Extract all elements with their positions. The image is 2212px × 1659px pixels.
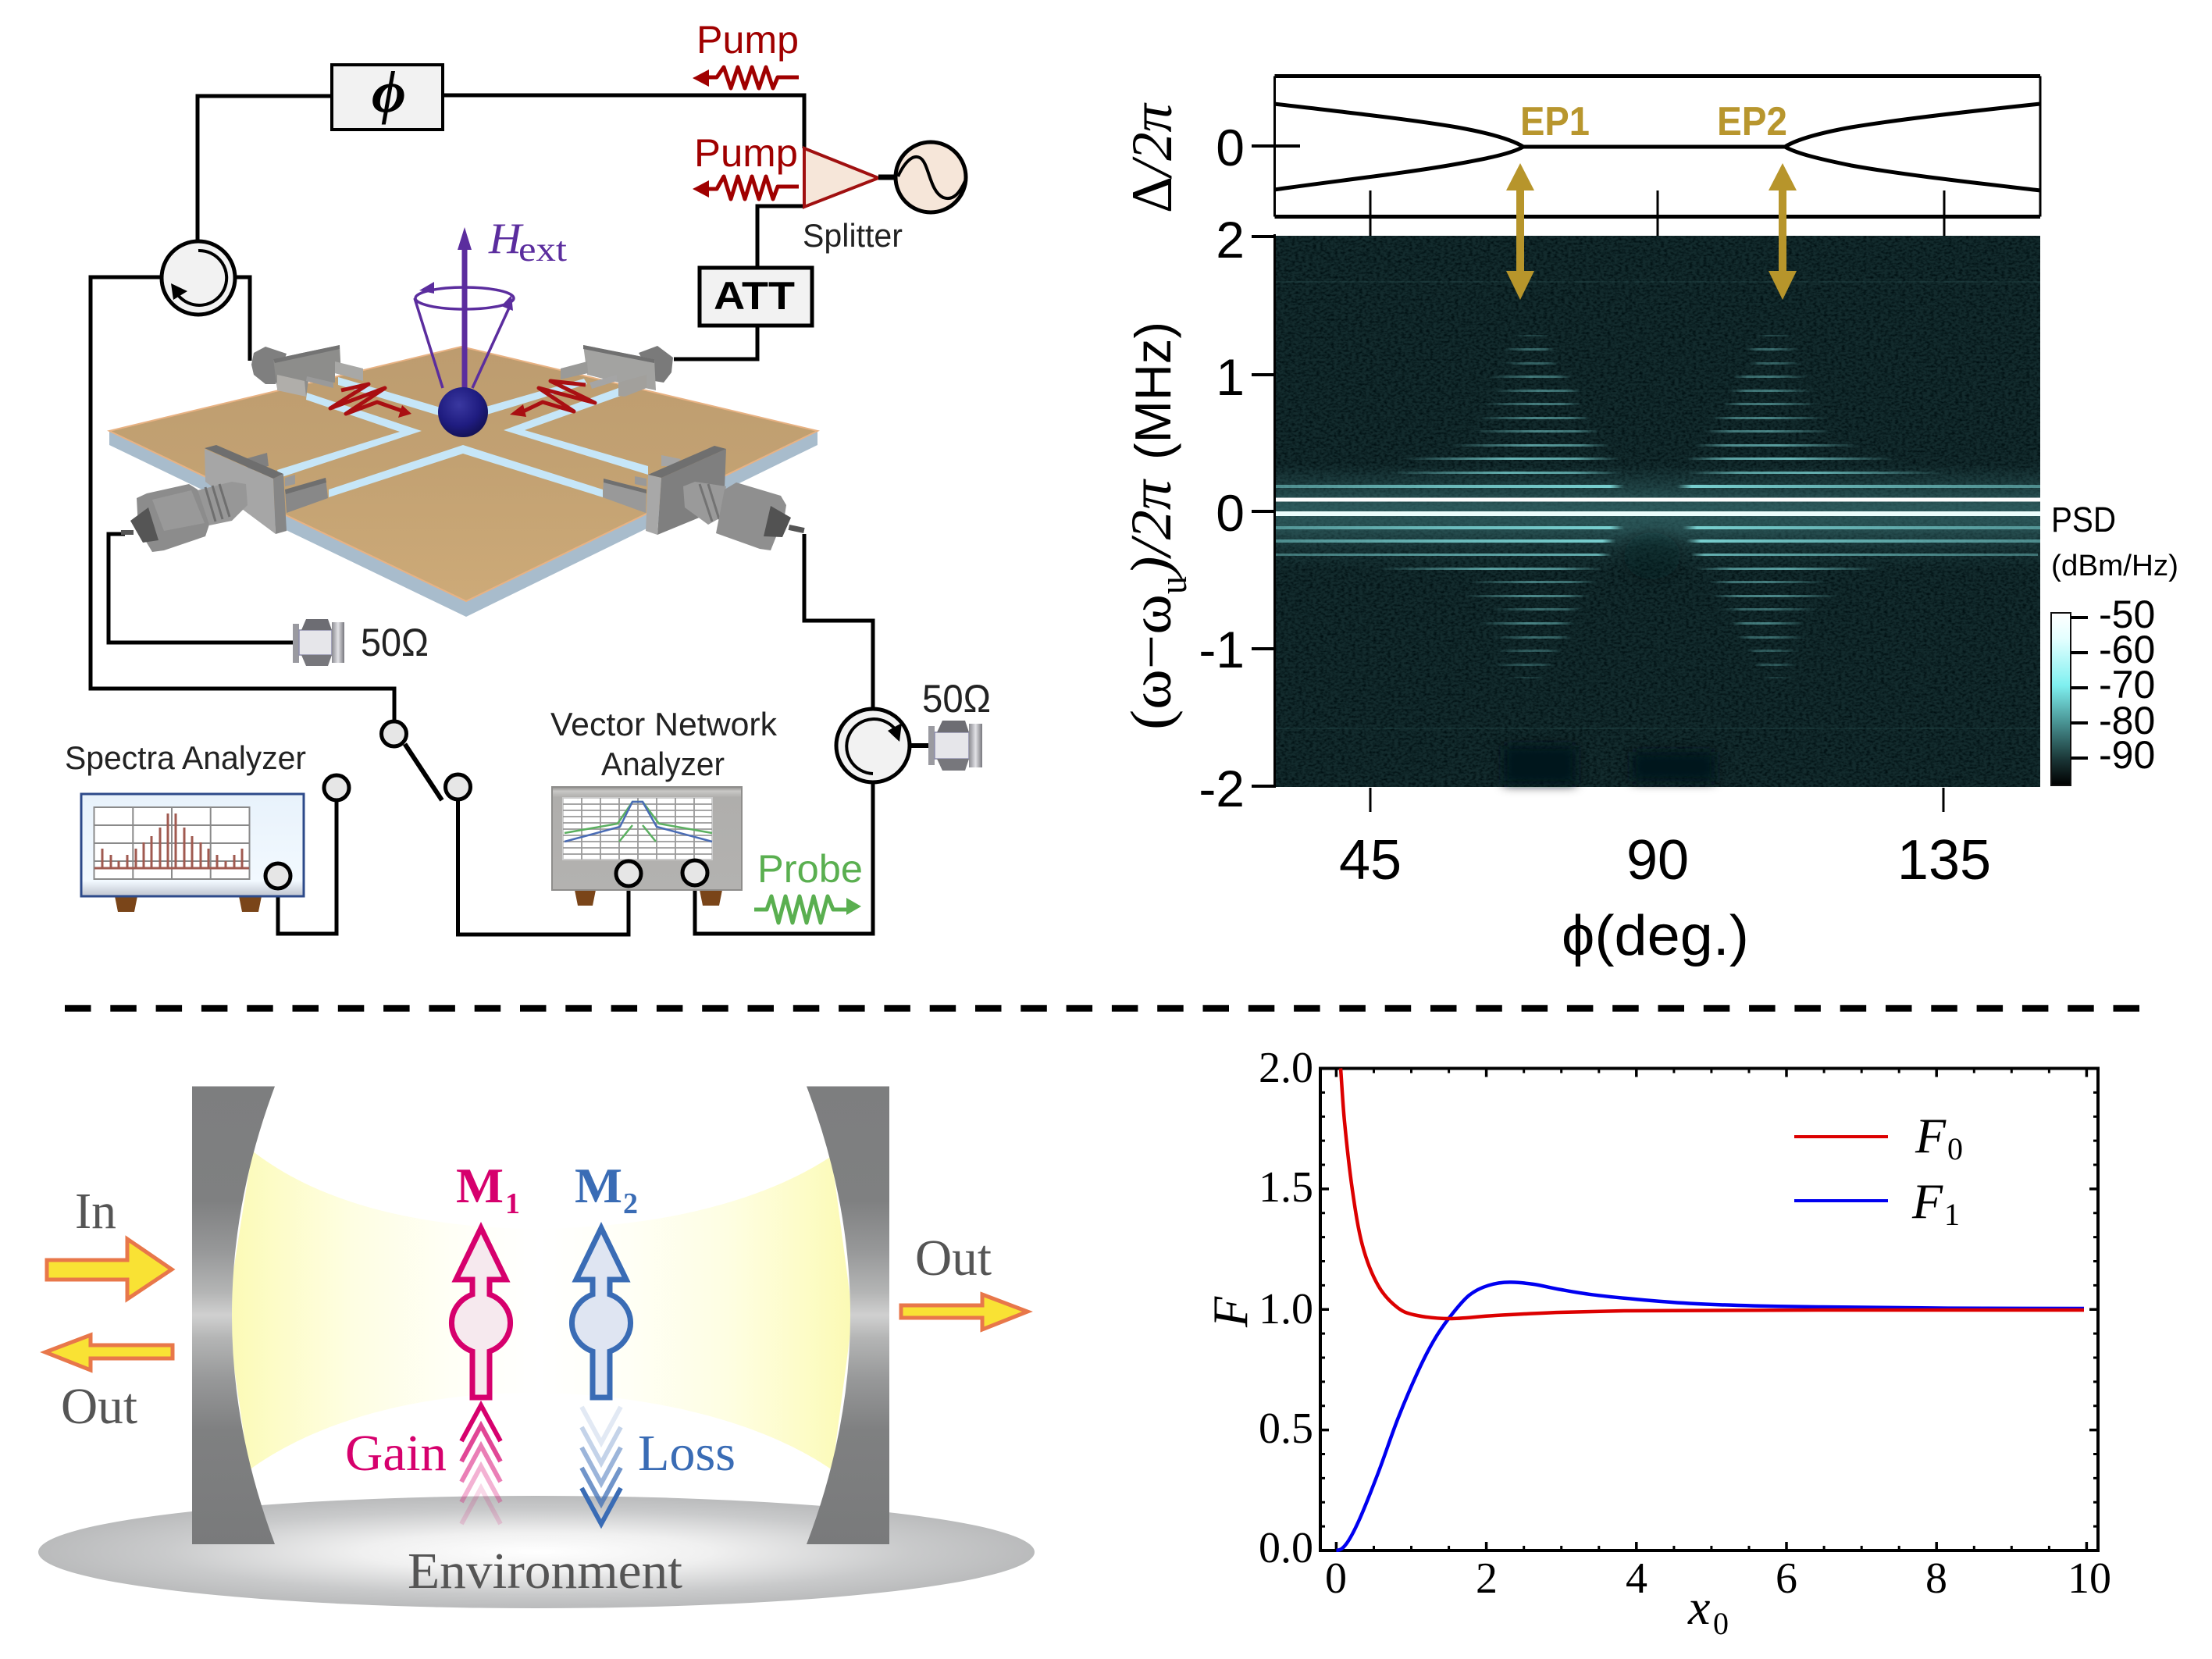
board slot left <box>277 393 422 478</box>
y tick labels: 0 <box>1216 484 1245 542</box>
pump label lower: Pump <box>694 131 798 175</box>
probe wiggle arrow <box>754 896 861 923</box>
magnon spin arrow M1 <box>451 1228 511 1397</box>
EP2 label: EP2 <box>1717 99 1787 144</box>
connector top left <box>251 345 363 397</box>
board slot right <box>504 388 648 475</box>
x tick labels: 90 <box>1626 829 1689 892</box>
vector network analyzer label <box>550 706 778 782</box>
in label: In <box>75 1183 116 1240</box>
board slot bottom <box>329 445 603 497</box>
y tick labels: -1 <box>1199 621 1245 678</box>
panel: experimental circuit schematic <box>65 18 991 935</box>
connector bottom left <box>121 445 328 552</box>
y tick labels: -2 <box>1199 760 1245 817</box>
precession cone and field arrow <box>415 227 514 393</box>
50 ohm terminator left <box>293 619 344 666</box>
divider <box>65 1005 2140 1012</box>
colour bar: -80 <box>2099 699 2155 742</box>
input arrow <box>47 1239 172 1299</box>
spectrum analyzer instrument <box>81 794 304 912</box>
gain label: Gain <box>345 1425 447 1482</box>
cavity light beam <box>226 1151 853 1470</box>
curve F1 <box>1336 1282 2084 1550</box>
microwave wiggle right <box>510 381 595 417</box>
chart frame <box>1320 1068 2098 1550</box>
connector bottom right <box>603 446 805 550</box>
PSD units: (dBm/Hz) <box>2051 550 2178 582</box>
M2 label: 2 <box>623 1187 638 1220</box>
y axis label: (MHz) <box>1124 322 1181 460</box>
left mirror <box>192 1087 275 1544</box>
eigenvalue splitting plot <box>1252 77 2040 236</box>
environment ellipse <box>38 1496 1035 1608</box>
M2 label: M <box>575 1158 622 1213</box>
panel: cavity schematic <box>38 1087 1035 1608</box>
M1 label: M <box>456 1158 504 1213</box>
chart ticks <box>1320 1068 2098 1550</box>
x tick labels: 2 <box>1476 1554 1498 1603</box>
y tick labels: 1.0 <box>1259 1285 1313 1333</box>
microstrip board <box>109 347 817 617</box>
central bright lines <box>1276 498 2040 516</box>
right out label: Out <box>915 1230 992 1287</box>
colour bar <box>2051 593 2155 785</box>
splitter label: Splitter <box>803 217 903 254</box>
delta axis label: Δ/2π <box>1120 102 1184 213</box>
colour bar: -90 <box>2099 733 2155 777</box>
y axis label: u <box>1151 576 1195 594</box>
x tick labels <box>1339 829 1991 892</box>
y axis label <box>1120 322 1195 730</box>
M1 label <box>456 1158 520 1220</box>
circulator lower right <box>836 709 928 782</box>
y tick labels: 1 <box>1216 348 1245 406</box>
H ext label <box>488 215 567 269</box>
50 ohm label left: 50Ω <box>361 621 429 664</box>
gold arrow EP1 <box>1506 163 1534 300</box>
legend <box>1794 1108 1963 1232</box>
pump wiggle arrow top <box>693 67 799 88</box>
wires <box>91 95 873 935</box>
colour bar: -50 <box>2099 593 2155 636</box>
left output arrow <box>45 1335 173 1370</box>
50 ohm terminator right <box>928 721 982 771</box>
x tick labels: 6 <box>1776 1554 1797 1603</box>
spectra analyzer label: Spectra Analyzer <box>65 739 306 776</box>
x axis label: 0 <box>1713 1606 1729 1641</box>
YIG sphere <box>438 387 488 437</box>
x tick labels: 135 <box>1897 829 1991 892</box>
x tick labels: 4 <box>1626 1554 1647 1603</box>
sideband lines left lobe <box>1374 335 1622 678</box>
x tick labels <box>1325 1554 2111 1603</box>
legend: 0 <box>1947 1131 1963 1166</box>
y tick labels <box>1199 211 1245 817</box>
y tick labels: 2 <box>1216 211 1245 269</box>
x tick labels: 0 <box>1325 1554 1347 1603</box>
magnon spin arrow M2 <box>572 1228 631 1397</box>
x axis label: ϕ(deg.) <box>1562 905 1749 967</box>
gold arrow EP2 <box>1769 163 1797 300</box>
board slot top <box>338 377 587 422</box>
circulator top left <box>162 241 235 315</box>
probe label: Probe <box>757 847 863 891</box>
x axis label <box>1687 1579 1729 1641</box>
y axis label: )/2π <box>1120 479 1184 579</box>
attenuator box: ATT <box>714 274 795 318</box>
M1 label: 1 <box>505 1187 520 1220</box>
50 ohm label right: 50Ω <box>922 677 991 721</box>
heatmap axes and ticks <box>1252 234 1943 812</box>
H ext label: ext <box>518 230 567 269</box>
colour bar: -70 <box>2099 663 2155 707</box>
delta axis zero: 0 <box>1216 119 1245 176</box>
legend: F <box>1915 1108 1947 1163</box>
pump label top: Pump <box>696 18 799 62</box>
M2 label <box>575 1158 638 1220</box>
left out label: Out <box>61 1378 137 1435</box>
EP1 label: EP1 <box>1520 99 1590 144</box>
attenuator box <box>700 268 812 326</box>
y axis label: F <box>1202 1296 1258 1328</box>
sideband lines right lobe <box>1684 335 1944 678</box>
near-central sideband lines <box>1276 485 2040 556</box>
switch and port nodes <box>265 721 707 888</box>
legend: 1 <box>1944 1197 1960 1232</box>
right mirror <box>807 1087 889 1544</box>
pump wiggle arrow lower <box>693 176 799 199</box>
panel: F line chart <box>1202 1044 2111 1641</box>
gain chevrons <box>461 1405 500 1524</box>
right output arrow <box>901 1294 1028 1330</box>
legend: F <box>1911 1173 1943 1229</box>
x tick labels: 45 <box>1339 829 1402 892</box>
y tick labels <box>1259 1044 1313 1572</box>
heatmap dark patches <box>1504 532 1715 785</box>
x tick labels: 10 <box>2068 1554 2111 1603</box>
loss label: Loss <box>638 1425 736 1482</box>
connector top right <box>561 345 673 397</box>
y tick labels: 2.0 <box>1259 1044 1313 1092</box>
y tick labels: 0.5 <box>1259 1404 1313 1453</box>
loss chevrons <box>582 1407 621 1524</box>
colour bar: -60 <box>2099 628 2155 671</box>
splitter triangle <box>804 148 878 207</box>
vector network analyzer instrument <box>552 787 742 906</box>
H ext label: H <box>488 215 524 263</box>
heatmap <box>1274 236 2040 787</box>
environment label: Environment <box>408 1543 682 1600</box>
panel: spectrum heatmap with EP curve <box>1120 77 2178 967</box>
curve F0 <box>1341 1068 2084 1319</box>
y tick labels: 0.0 <box>1259 1524 1313 1572</box>
vector network analyzer label: Vector Network <box>550 706 778 742</box>
x axis label: x <box>1687 1579 1710 1635</box>
vector network analyzer label: Analyzer <box>601 746 725 782</box>
y tick labels: 1.5 <box>1259 1163 1313 1212</box>
microwave source <box>878 142 966 212</box>
y axis label: (ω−ω <box>1120 594 1184 730</box>
phase shifter box <box>332 59 443 130</box>
phase shifter box: ϕ <box>372 59 406 125</box>
microwave wiggle left <box>330 384 411 418</box>
x tick labels: 8 <box>1925 1554 1947 1603</box>
PSD label: PSD <box>2051 500 2116 539</box>
